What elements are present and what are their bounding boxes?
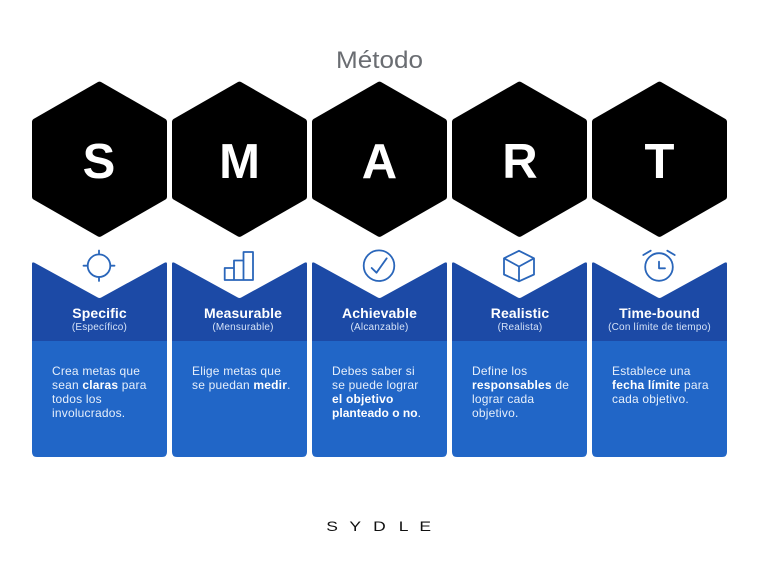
card header: Realistic: Realistic [491,305,549,321]
hexagon: M: M [219,135,260,189]
card body: Achievable: se puede lograr [332,378,418,392]
icon: target [84,250,114,281]
card header: Measurable: Measurable [204,305,282,321]
hexagon: S [32,82,167,237]
hexagon: T [592,82,727,237]
card body: Realistic: Define los [472,364,527,378]
card body: Realistic: lograr cada [472,392,534,406]
card body: Specific: involucrados. [52,406,125,420]
hexagon: M [172,82,307,237]
card body: Realistic: responsables de [472,378,569,392]
card header: Specific [32,262,167,342]
icon: check circle [364,250,394,281]
card header: Measurable: (Mensurable) [212,322,274,333]
card header: Time-bound: Time-bound [619,305,700,321]
card body: Realistic [452,341,587,457]
card header: Achievable [312,262,447,342]
hexagon: A [312,82,447,237]
card header: Time-bound: (Con límite de tiempo) [608,322,711,333]
card body: Achievable: Debes saber si [332,364,415,378]
card header: Specific: (Específico) [72,322,127,333]
card header: Realistic: (Realista) [498,322,542,333]
card body: Measurable: se puedan medir. [192,378,291,392]
card body: Measurable [172,341,307,457]
hexagon: R: R [502,135,538,189]
panel: Time-bound [592,82,727,457]
panel: Specific [32,82,167,457]
card body: Specific: sean claras para [52,378,147,392]
icon: cube [504,251,534,281]
card body: Time-bound: fecha límite para [612,378,709,392]
card header: Achievable: Achievable [342,305,417,321]
panel: Realistic [452,82,587,457]
title: Método [336,47,423,74]
panel: Measurable [172,82,307,457]
icon: alarm clock [643,251,675,281]
card body: Achievable [312,341,447,457]
card header: Realistic [452,262,587,342]
card body: Specific: todos los [52,392,102,406]
hexagon: A: A [362,135,397,189]
card body: Measurable: Elige metas que [192,364,281,378]
card body: Achievable: planteado o no. [332,406,421,420]
card body: Specific: Crea metas que [52,364,140,378]
card header: Time-bound [592,262,727,342]
card body: Time-bound: cada objetivo. [612,392,689,406]
hexagon: R [452,82,587,237]
icon: bar chart [225,252,253,280]
panel: Achievable [312,82,447,457]
card header: Achievable: (Alcanzable) [351,322,408,333]
hexagon: T: T [645,135,675,189]
card body: Realistic: objetivo. [472,406,518,420]
logo: SYDLE: SYDLE [326,520,431,535]
card header: Specific: Specific [72,305,127,321]
card body: Specific [32,341,167,457]
card body: Time-bound [592,341,727,457]
card body: Time-bound: Establece una [612,364,691,378]
card header: Measurable [172,262,307,342]
hexagon: S: S [83,135,115,189]
card body: Achievable: el objetivo [332,392,394,406]
